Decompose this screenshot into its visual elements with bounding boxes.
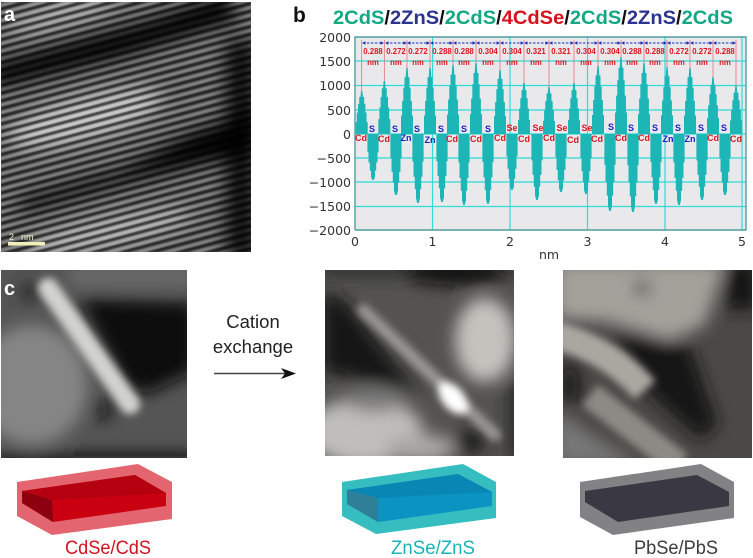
spacing values: 0.272	[408, 47, 428, 56]
x axis labels: nm	[539, 247, 559, 262]
x axis labels: 4	[661, 234, 669, 249]
spacing values: 0.288	[645, 47, 665, 56]
cation labels: Zn	[424, 135, 436, 145]
spacing values: 0.288	[363, 47, 383, 56]
spacing values: 0.288	[432, 47, 452, 56]
anion labels: Se	[556, 123, 568, 133]
y axis labels: −500	[317, 151, 351, 166]
spacing values: nm	[458, 58, 470, 67]
schematic: CdSe/CdS	[17, 464, 172, 535]
cation labels: Zn	[662, 134, 674, 144]
anion labels: S	[485, 124, 491, 134]
spacing values: nm	[673, 58, 685, 67]
cation labels: Cd	[494, 133, 506, 143]
x axis labels: 5	[738, 234, 746, 249]
schematic: PbSe/PbS	[580, 464, 734, 535]
cation labels	[355, 133, 742, 145]
cation labels: Cd	[730, 134, 742, 144]
title: layer sequence: 2CdS/2ZnS/2CdS/4CdSe/2CdS/2ZnS/2CdS	[333, 8, 733, 29]
anion labels: S	[608, 122, 614, 132]
anion labels: S	[675, 123, 681, 133]
y axis labels	[309, 30, 351, 238]
cation labels: Cd	[355, 133, 367, 143]
spacing values: 0.272	[669, 47, 689, 56]
scale bar: nm	[21, 232, 34, 242]
scale bar: 2	[9, 232, 14, 242]
cation labels: Zn	[684, 134, 696, 144]
spacing values: nm	[506, 58, 518, 67]
anion labels: S	[721, 123, 727, 133]
spacing values: 0.288	[454, 47, 474, 56]
spacing values: nm	[626, 58, 638, 67]
spacing values: nm	[604, 58, 616, 67]
schematic: ZnSe/ZnS	[342, 464, 496, 534]
cation labels: Cd	[567, 135, 579, 145]
anion labels: S	[438, 124, 444, 134]
x axis labels: 0	[351, 234, 359, 249]
y axis labels: 0	[343, 127, 351, 142]
anion labels	[369, 122, 727, 134]
y axis labels: 2000	[319, 30, 351, 45]
cation labels: Cd	[518, 134, 530, 144]
spacing values: 0.321	[551, 47, 571, 56]
spacing values: 0.288	[715, 47, 735, 56]
spacing values: 0.321	[526, 47, 546, 56]
y axis labels: −1000	[309, 175, 351, 190]
anion labels: Se	[506, 123, 518, 133]
anion labels: S	[461, 124, 467, 134]
spacing values: nm	[719, 58, 731, 67]
panel c label: c	[4, 278, 15, 300]
spacing values: 0.304	[600, 47, 620, 56]
label: cation exchange: exchange	[213, 336, 293, 357]
cation labels: Zn	[400, 133, 412, 143]
spacing values: nm	[580, 58, 592, 67]
anion labels: S	[698, 123, 704, 133]
red guide lines	[362, 40, 736, 91]
cation labels: Cd	[446, 134, 458, 144]
spacing values: nm	[555, 58, 567, 67]
cation labels: Cd	[470, 134, 482, 144]
anion labels: S	[414, 124, 420, 134]
panel a label: a	[4, 4, 16, 26]
spacing values	[363, 47, 735, 67]
cation labels: Cd	[378, 134, 390, 144]
spacing values: nm	[649, 58, 661, 67]
cation labels: Cd	[638, 133, 650, 143]
x axis labels: 2	[506, 234, 514, 249]
y axis labels: −2000	[309, 223, 351, 238]
panel a: lattice micrograph	[0, 0, 260, 265]
panel b label: b	[293, 4, 306, 27]
spacing arrows	[363, 42, 735, 44]
spacing values: nm	[530, 58, 542, 67]
spacing values: 0.304	[478, 47, 498, 56]
anion labels: Se	[581, 123, 593, 133]
axis frame	[355, 37, 746, 230]
scale bar	[8, 234, 45, 246]
spacing values: nm	[412, 58, 424, 67]
spacing values: 0.304	[576, 47, 596, 56]
panel c micrograph: ZnSe/ZnS rod	[325, 270, 514, 456]
spacing values: nm	[367, 58, 379, 67]
spacing values: 0.272	[692, 47, 712, 56]
spacing values: nm	[436, 58, 448, 67]
negative valleys	[367, 134, 731, 212]
y axis labels: −1500	[309, 199, 351, 214]
intensity profile chart	[309, 30, 746, 262]
y axis labels: 1000	[319, 78, 351, 93]
panel c micrograph: CdSe/CdS rod	[1, 270, 187, 458]
arrow: cation exchange	[214, 368, 296, 379]
anion labels: S	[392, 124, 398, 134]
spacing values: 0.288	[622, 47, 642, 56]
cation labels: Cd	[591, 134, 603, 144]
anion labels: S	[628, 123, 634, 133]
y axis labels: 500	[327, 103, 351, 118]
x axis labels: 3	[584, 234, 591, 249]
cation labels: Cd	[543, 133, 555, 143]
spacing values: nm	[696, 58, 708, 67]
anion labels: S	[652, 123, 658, 133]
spacing values: nm	[482, 58, 494, 67]
y axis labels: 1500	[319, 54, 351, 69]
x axis labels	[351, 234, 746, 262]
positive peaks	[356, 57, 742, 134]
spacing values: 0.304	[502, 47, 522, 56]
panel c micrograph: PbSe/PbS rods	[563, 270, 752, 458]
anion labels: Se	[532, 123, 544, 133]
label: cation exchange	[213, 311, 293, 357]
anion labels: S	[369, 124, 375, 134]
spacing values: nm	[390, 58, 402, 67]
cation labels: Cd	[615, 133, 627, 143]
spacing values: 0.272	[386, 47, 406, 56]
cation labels: Cd	[707, 133, 719, 143]
label: cation exchange: Cation	[226, 311, 280, 332]
x axis labels: 1	[429, 234, 436, 249]
